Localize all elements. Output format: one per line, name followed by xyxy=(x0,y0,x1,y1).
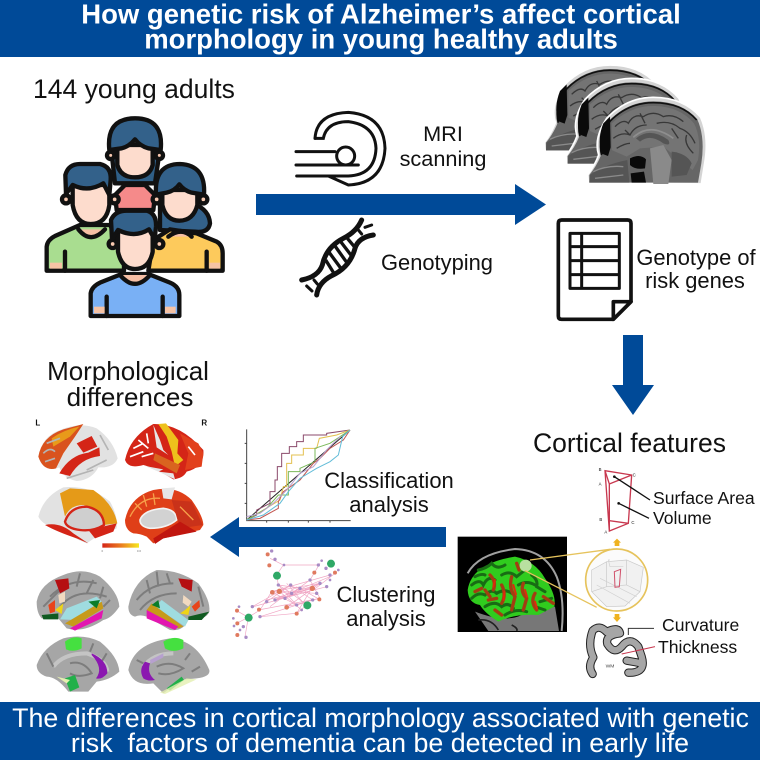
label: Classification analysis xyxy=(324,468,454,517)
arrow: to analyses xyxy=(210,517,446,557)
heading: Morphological differences: differences xyxy=(67,382,193,412)
label: MRI scanning: MRI xyxy=(423,121,463,146)
label: Curvature and Thickness: Thickness xyxy=(658,637,737,657)
person: back woman xyxy=(107,118,163,210)
arrow: to MRI and genotype xyxy=(256,184,546,225)
bottom conclusion banner: risk factors of dementia can be detected in early life xyxy=(71,728,689,758)
label: Clustering analysis: Clustering xyxy=(336,582,436,607)
legend: colour scale: 0 xyxy=(101,549,103,553)
person: right woman xyxy=(148,164,223,271)
label: MRI scanning: scanning xyxy=(400,146,486,171)
label: Curvature and Thickness: Curvature xyxy=(662,615,739,635)
chart: brain maps of morphological differences: L xyxy=(35,419,40,428)
image: MRI with cortical ribbon xyxy=(458,537,567,632)
chart: clustering network xyxy=(232,549,340,639)
diagram: surface area and volume prism: A xyxy=(604,529,607,534)
brain: left lateral atlas xyxy=(37,571,119,631)
diagram: surface area and volume prism: B xyxy=(599,467,602,472)
label: MRI scanning xyxy=(400,121,486,171)
heading: Morphological differences: Morphological xyxy=(47,356,209,386)
icon: genotype document xyxy=(558,220,631,319)
brain: left medial map xyxy=(38,487,117,543)
image: stacked MRI head slices xyxy=(544,65,706,184)
brain: left lateral map xyxy=(38,424,118,481)
title banner xyxy=(0,0,760,57)
label: Classification analysis: analysis xyxy=(349,492,429,517)
brain: right lateral map xyxy=(125,423,203,479)
icon: group of young adults xyxy=(47,118,223,316)
brain: right lateral atlas xyxy=(128,570,209,630)
diagram: surface area and volume prism xyxy=(599,467,650,534)
label: Clustering analysis: analysis xyxy=(346,606,426,631)
icon: MRI scanner xyxy=(296,112,385,185)
chart: brain maps of morphological differences: R xyxy=(201,419,207,428)
legend: colour scale: 0.6 xyxy=(137,549,141,553)
person: left man xyxy=(47,164,124,271)
heading: 144 young adults: 144 young adults xyxy=(33,74,235,104)
label: Genotyping: Genotyping xyxy=(381,250,493,275)
heading: Cortical features: Cortical features xyxy=(533,428,726,458)
label: Surface Area and Volume: Volume xyxy=(653,508,712,528)
label: Genotype of risk genes xyxy=(636,245,757,293)
label: Surface Area and Volume: Surface Area xyxy=(653,488,755,508)
chart: brain maps of morphological differences xyxy=(35,419,209,694)
bottom conclusion banner: The differences in cortical morphology associated with genetic xyxy=(12,703,749,733)
label: Classification analysis: Classification xyxy=(324,468,454,493)
title banner: morphology in young healthy adults xyxy=(144,24,618,54)
diagram: cortical fold curvature and thickness: WM xyxy=(606,663,614,669)
icon: DNA helix xyxy=(302,220,373,295)
label: Clustering analysis xyxy=(336,582,436,631)
label: Genotype of risk genes: risk genes xyxy=(645,268,745,293)
heading: Morphological differences xyxy=(47,356,209,412)
diagram: surface area and volume prism: C xyxy=(631,520,634,525)
person: front man xyxy=(91,211,179,316)
chart: classification ROC curves xyxy=(245,429,351,523)
diagram: surface area and volume prism: C xyxy=(633,473,636,478)
label: Surface Area and Volume xyxy=(653,488,755,528)
diagram: cortical fold curvature and thickness xyxy=(590,628,655,674)
brain: right medial map xyxy=(125,487,203,544)
diagram: surface area and volume prism: A xyxy=(599,482,602,487)
brain: right medial atlas xyxy=(128,638,209,694)
brain: left medial atlas xyxy=(37,636,119,692)
bottom conclusion banner xyxy=(0,702,760,760)
diagram: surface area and volume prism: B xyxy=(599,517,602,522)
arrow: to cortical features xyxy=(612,335,654,415)
diagram: zoom lens xyxy=(525,539,648,622)
legend: colour scale xyxy=(101,543,141,553)
label: Curvature and Thickness xyxy=(658,615,739,657)
label: Genotype of risk genes: Genotype of xyxy=(636,245,757,270)
